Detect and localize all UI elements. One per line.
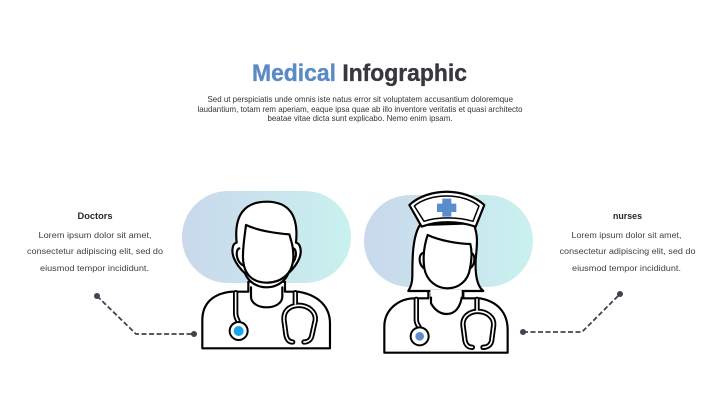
title: Medical Infographic [252,60,467,87]
stethoscope [410,299,494,347]
icon: doctor [202,202,330,348]
nurses description: eiusmod tempor incididunt. [572,263,681,273]
nurses description: consectetur adipiscing elit, sed do [560,246,696,256]
pill background: nurse [364,195,533,287]
icon: nurse [384,192,508,353]
panel: doctors text [27,211,163,273]
doctors description: Lorem ipsum dolor sit amet, [38,230,152,240]
arrow: nurse connector [520,291,623,335]
intro text block [198,94,523,123]
intro text block: Sed ut perspiciatis unde omnis iste natus error sit voluptatem accusantium doloremque [208,94,513,104]
doctors description [27,230,163,273]
doctors description: consectetur adipiscing elit, sed do [27,246,163,256]
panel: nurses text [560,211,696,273]
stethoscope [229,293,315,342]
nurses description: Lorem ipsum dolor sit amet, [572,230,682,240]
intro text block: beatae vitae dicta sunt explicabo. Nemo enim ipsam. [268,113,452,123]
icon: medical cross [437,199,456,217]
pill background: doctor [182,191,351,283]
nurses description [560,230,696,273]
heading: doctors: Doctors [78,211,112,221]
arrow: doctor connector [94,293,197,337]
intro text block: laudantium, totam rem aperiam, eaque ipsa quae ab illo inventore veritatis et quasi architecto [198,104,523,114]
heading: nurses: nurses [613,211,642,221]
doctors description: eiusmod tempor incididunt. [40,263,149,273]
